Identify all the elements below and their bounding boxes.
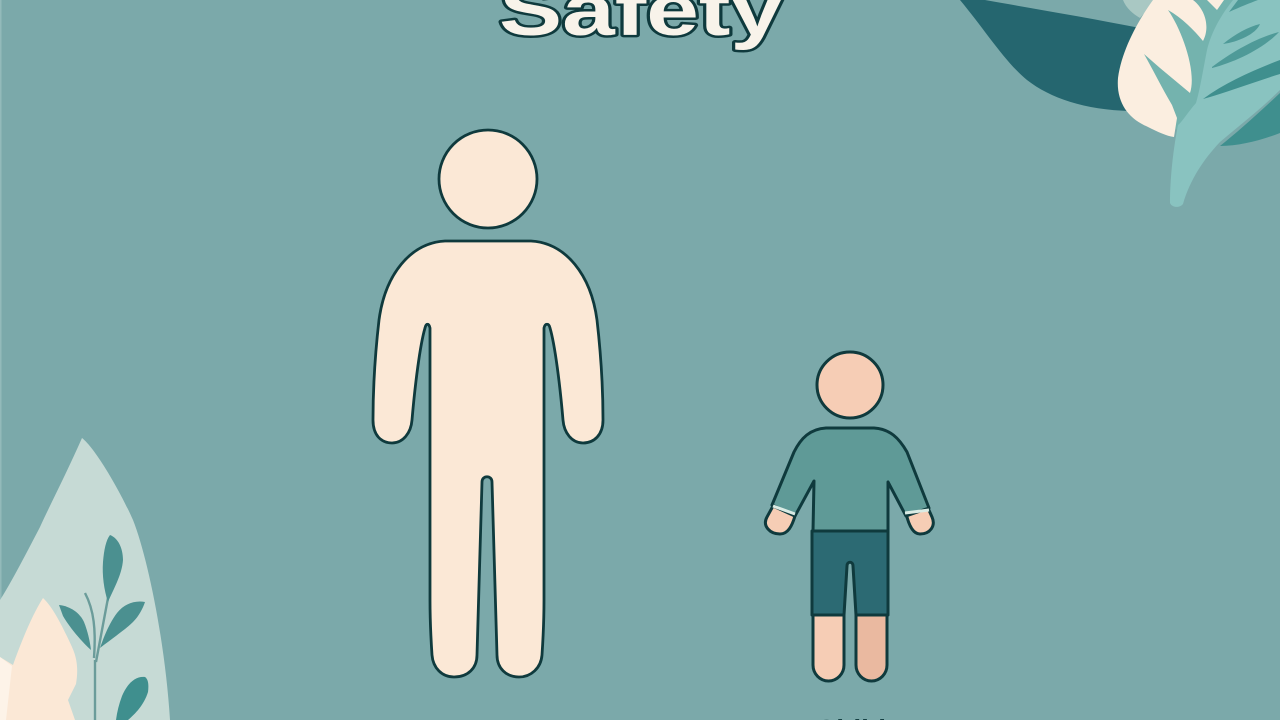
adult body: [373, 241, 603, 677]
adult figure: [373, 130, 603, 677]
cream leaf small piece: [1207, 0, 1224, 10]
cream leaf: [0, 598, 77, 720]
teal leaf behind cream leaf: [1136, 0, 1240, 130]
dark lower leaf: [1220, 93, 1280, 146]
decoration: top-right leaves: [960, 0, 1280, 207]
child left cuff: [773, 506, 795, 514]
frond stripe 2: [1212, 32, 1279, 68]
child right cuff: [905, 510, 929, 513]
decoration: bottom-left plant: [0, 438, 170, 720]
frond stripe top: [1229, 0, 1258, 12]
pale leaf: [0, 438, 170, 720]
top leaf: [103, 535, 123, 602]
white leaf chunk: [0, 657, 12, 720]
frond stripe 1: [1223, 24, 1260, 44]
child left hand: [765, 506, 795, 534]
child shorts: [812, 531, 888, 615]
bottom leaf: [116, 677, 148, 720]
child shirt: [772, 428, 929, 531]
adult head: [439, 130, 537, 228]
dark leaf: [960, 0, 1140, 111]
child right leg: [856, 612, 887, 681]
child head: [817, 352, 883, 418]
left leaf: [59, 605, 91, 650]
child left leg: [813, 612, 844, 681]
frond stripe 3: [1203, 60, 1280, 99]
right leaf: [100, 601, 145, 648]
pale leaf tip: [1123, 0, 1156, 18]
fern frond: [1170, 0, 1280, 207]
cream leaf: [1118, 0, 1206, 137]
child figure: [765, 352, 933, 681]
plant stems: [85, 593, 108, 720]
child right hand: [906, 508, 933, 534]
